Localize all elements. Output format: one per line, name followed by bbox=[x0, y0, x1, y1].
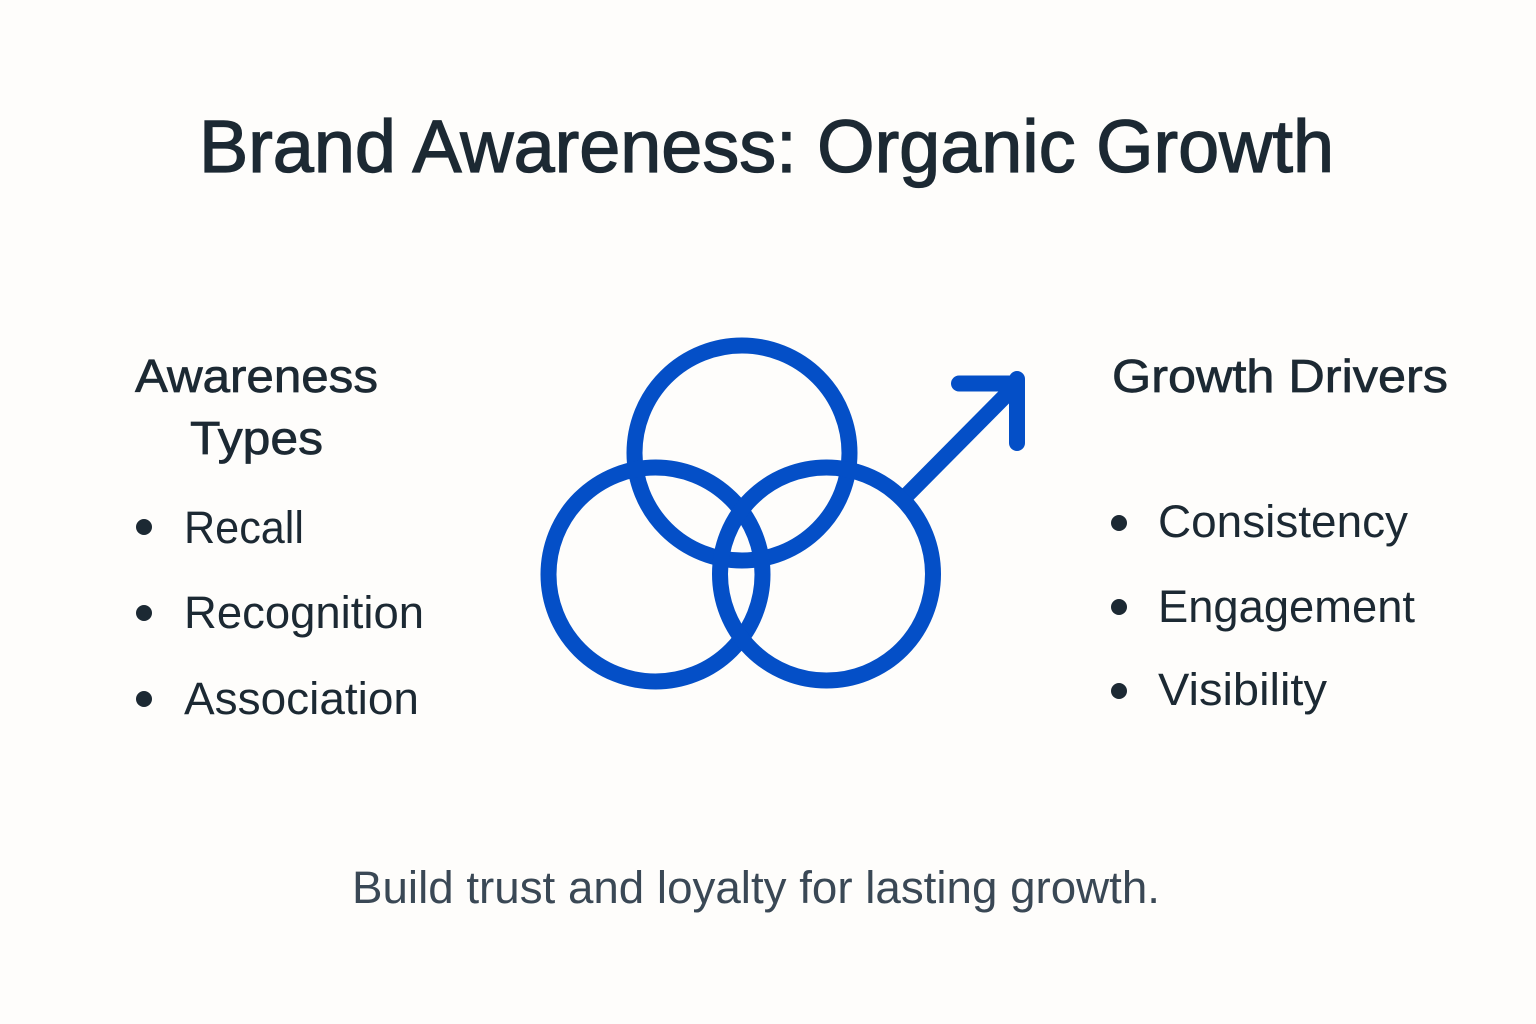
panel: growth drivers bbox=[1111, 350, 1448, 715]
tagline: Build trust and loyalty for lasting growth. bbox=[352, 862, 1160, 913]
list: awareness types bbox=[136, 502, 424, 724]
list: growth drivers: Consistency bbox=[1158, 496, 1409, 547]
list: growth drivers: Engagement bbox=[1158, 581, 1415, 632]
heading: awareness types: Types bbox=[190, 412, 323, 464]
heading: growth drivers: Growth Drivers bbox=[1112, 350, 1448, 402]
list: awareness types: Recognition bbox=[184, 587, 424, 638]
list: growth drivers bbox=[1111, 496, 1415, 715]
heading: awareness types: Awareness bbox=[135, 350, 378, 402]
panel: awareness types bbox=[135, 350, 424, 724]
icon: three overlapping circles with growth arrow bbox=[548, 346, 1017, 682]
heading: awareness types bbox=[135, 350, 378, 464]
list: awareness types: Association bbox=[184, 673, 419, 724]
list: awareness types: Recall bbox=[184, 502, 304, 553]
list: growth drivers: Visibility bbox=[1158, 664, 1328, 715]
title: Brand Awareness: Organic Growth bbox=[199, 105, 1334, 188]
